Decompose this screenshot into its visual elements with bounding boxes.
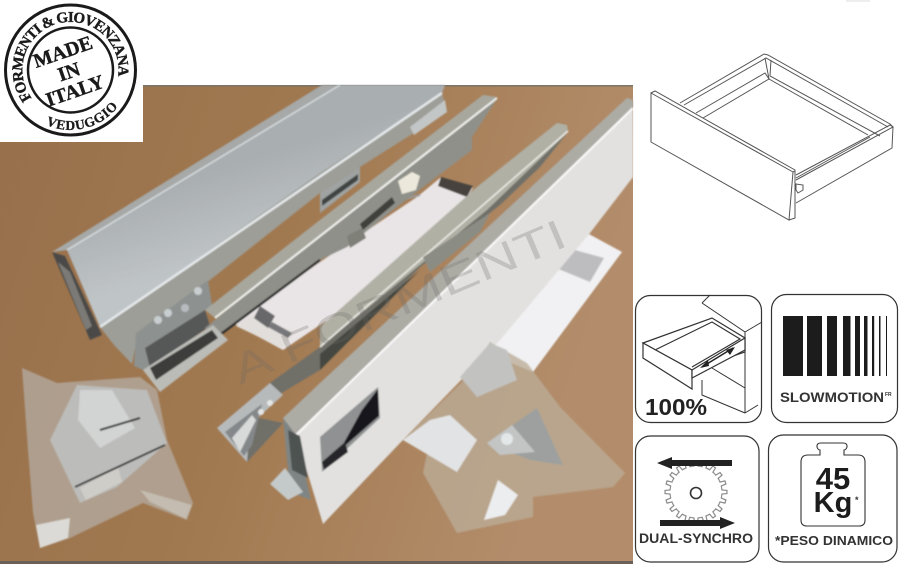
rail 2 <box>217 123 568 462</box>
label: dual-synchro: DUAL-SYNCHRO <box>639 531 753 546</box>
hardware bag right <box>403 342 625 533</box>
watermark: A FORMENTI <box>225 210 573 393</box>
arrow: right <box>660 517 735 529</box>
instruction sheet under rails <box>233 177 473 350</box>
stamp center text: MADE <box>31 32 96 73</box>
stamp center text: IN <box>55 58 84 86</box>
drawer <box>643 318 745 389</box>
icon: slowmotion <box>772 294 898 422</box>
hardware bag left <box>22 368 193 548</box>
weight value: 45 <box>816 461 850 496</box>
icon: dynamic load <box>768 435 897 562</box>
icon: slowmotion: FR <box>885 392 892 398</box>
stamp center text: ITALY <box>43 71 108 111</box>
stamp center text <box>31 32 108 111</box>
cabinet <box>702 295 762 413</box>
barcode bars <box>783 316 887 376</box>
label: slowmotion: SLOWMOTION <box>780 390 884 405</box>
product photo <box>0 85 633 564</box>
double arrow <box>702 348 733 367</box>
stamp ring text: FORMENTI & GIOVENZANA <box>12 12 129 104</box>
icon: dynamic load: * <box>855 495 859 505</box>
gear <box>665 461 727 523</box>
label: 100%: 100% <box>645 394 707 420</box>
icon: full extension <box>636 295 762 422</box>
weight outline <box>801 443 865 526</box>
arrow: left <box>657 457 732 469</box>
stamp bottom text: VEDUGGIO <box>48 102 116 130</box>
instruction sheet under right panel <box>480 233 622 372</box>
rail 1 <box>143 95 497 392</box>
right drawer side panel <box>270 98 633 524</box>
icon: dynamic load: Kg <box>814 487 852 519</box>
label: peso dinamico: *PESO DINAMICO <box>775 534 893 548</box>
left drawer side panel <box>52 85 447 372</box>
icon: dual synchro <box>636 436 759 562</box>
made in Italy stamp <box>0 4 143 142</box>
drawer line drawing <box>651 54 893 220</box>
